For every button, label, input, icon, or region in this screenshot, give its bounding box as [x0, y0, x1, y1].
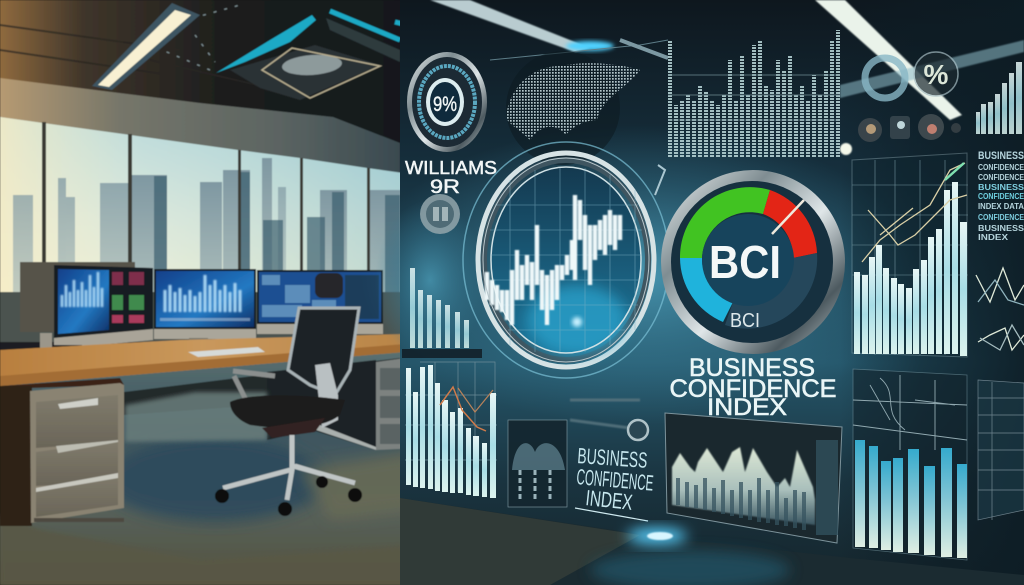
headrest — [315, 273, 343, 298]
monitor: back left — [20, 262, 135, 332]
gauge main label: BCI — [709, 236, 781, 288]
BCI gauge — [661, 170, 845, 354]
office chair — [215, 273, 362, 516]
label: Williams: 9R — [430, 177, 460, 198]
candlesticks — [487, 195, 620, 325]
floor — [0, 340, 420, 585]
chair base — [223, 435, 355, 500]
ceiling — [0, 0, 420, 150]
monitor: center — [154, 269, 256, 350]
panel: far right lower table — [978, 380, 1024, 520]
heading: Business Confidence Index — [670, 354, 836, 421]
glass panel background — [360, 0, 1024, 585]
monitor: left — [54, 265, 153, 357]
icon: knobs row — [858, 114, 961, 142]
desk — [0, 334, 405, 400]
office background — [0, 0, 420, 585]
flare — [627, 528, 687, 544]
subheading: Business Confidence Index (panel): CONFIDENCE — [576, 464, 654, 496]
subheading: Business Confidence Index (panel): BUSINESS — [577, 443, 648, 473]
chart: top histogram — [668, 30, 840, 157]
chart: lower left bars with line — [405, 362, 497, 498]
chart: descending bars — [410, 268, 469, 348]
chart: right rising bars with lines — [852, 153, 968, 357]
icon: percent rings — [865, 52, 958, 98]
icon: percent rings: % — [924, 59, 949, 90]
heading: Business Confidence Index: BUSINESS — [689, 354, 815, 382]
gauge small label: BCI — [730, 310, 760, 332]
circular market chart — [463, 142, 669, 378]
monitor: right — [257, 270, 383, 334]
keyboard — [188, 347, 265, 357]
gauge zones — [680, 187, 817, 329]
right drawer cabinet — [310, 356, 420, 450]
text block: far right data list — [978, 150, 1024, 242]
ceiling light — [92, 3, 200, 90]
windows with skyline — [0, 117, 410, 342]
line charts: far right — [976, 268, 1024, 350]
left drawer cabinet — [0, 383, 124, 526]
subheading: Business Confidence Index (panel): INDEX — [584, 485, 634, 515]
gauge value: 9% — [433, 93, 457, 116]
seat — [230, 395, 345, 428]
gauge: Williams %R — [407, 52, 487, 152]
label: Williams — [405, 158, 497, 198]
dotted globe — [506, 51, 640, 165]
wall band above windows — [0, 78, 400, 175]
chart: center mountain panel — [665, 413, 842, 543]
armrest — [233, 371, 275, 412]
heading: Business Confidence Index: INDEX — [707, 394, 787, 421]
chart: top right bars — [976, 62, 1022, 134]
ceiling beams and lights — [430, 0, 1024, 155]
text block: far right data list: BUSINESS — [978, 183, 1024, 192]
chart: lower right cyan bars — [853, 369, 967, 560]
panel: small icons chart — [508, 400, 648, 507]
label: Williams: WILLIAMS — [405, 158, 497, 178]
text block: far right data list: INDEX — [978, 233, 1009, 242]
monitors — [20, 262, 383, 357]
subheading: Business Confidence Index (panel) — [575, 443, 654, 521]
small dial — [420, 194, 460, 234]
chair back — [288, 308, 359, 395]
text block: far right data list: BUSINESS — [978, 224, 1024, 233]
heading: Business Confidence Index: CONFIDENCE — [670, 375, 836, 403]
